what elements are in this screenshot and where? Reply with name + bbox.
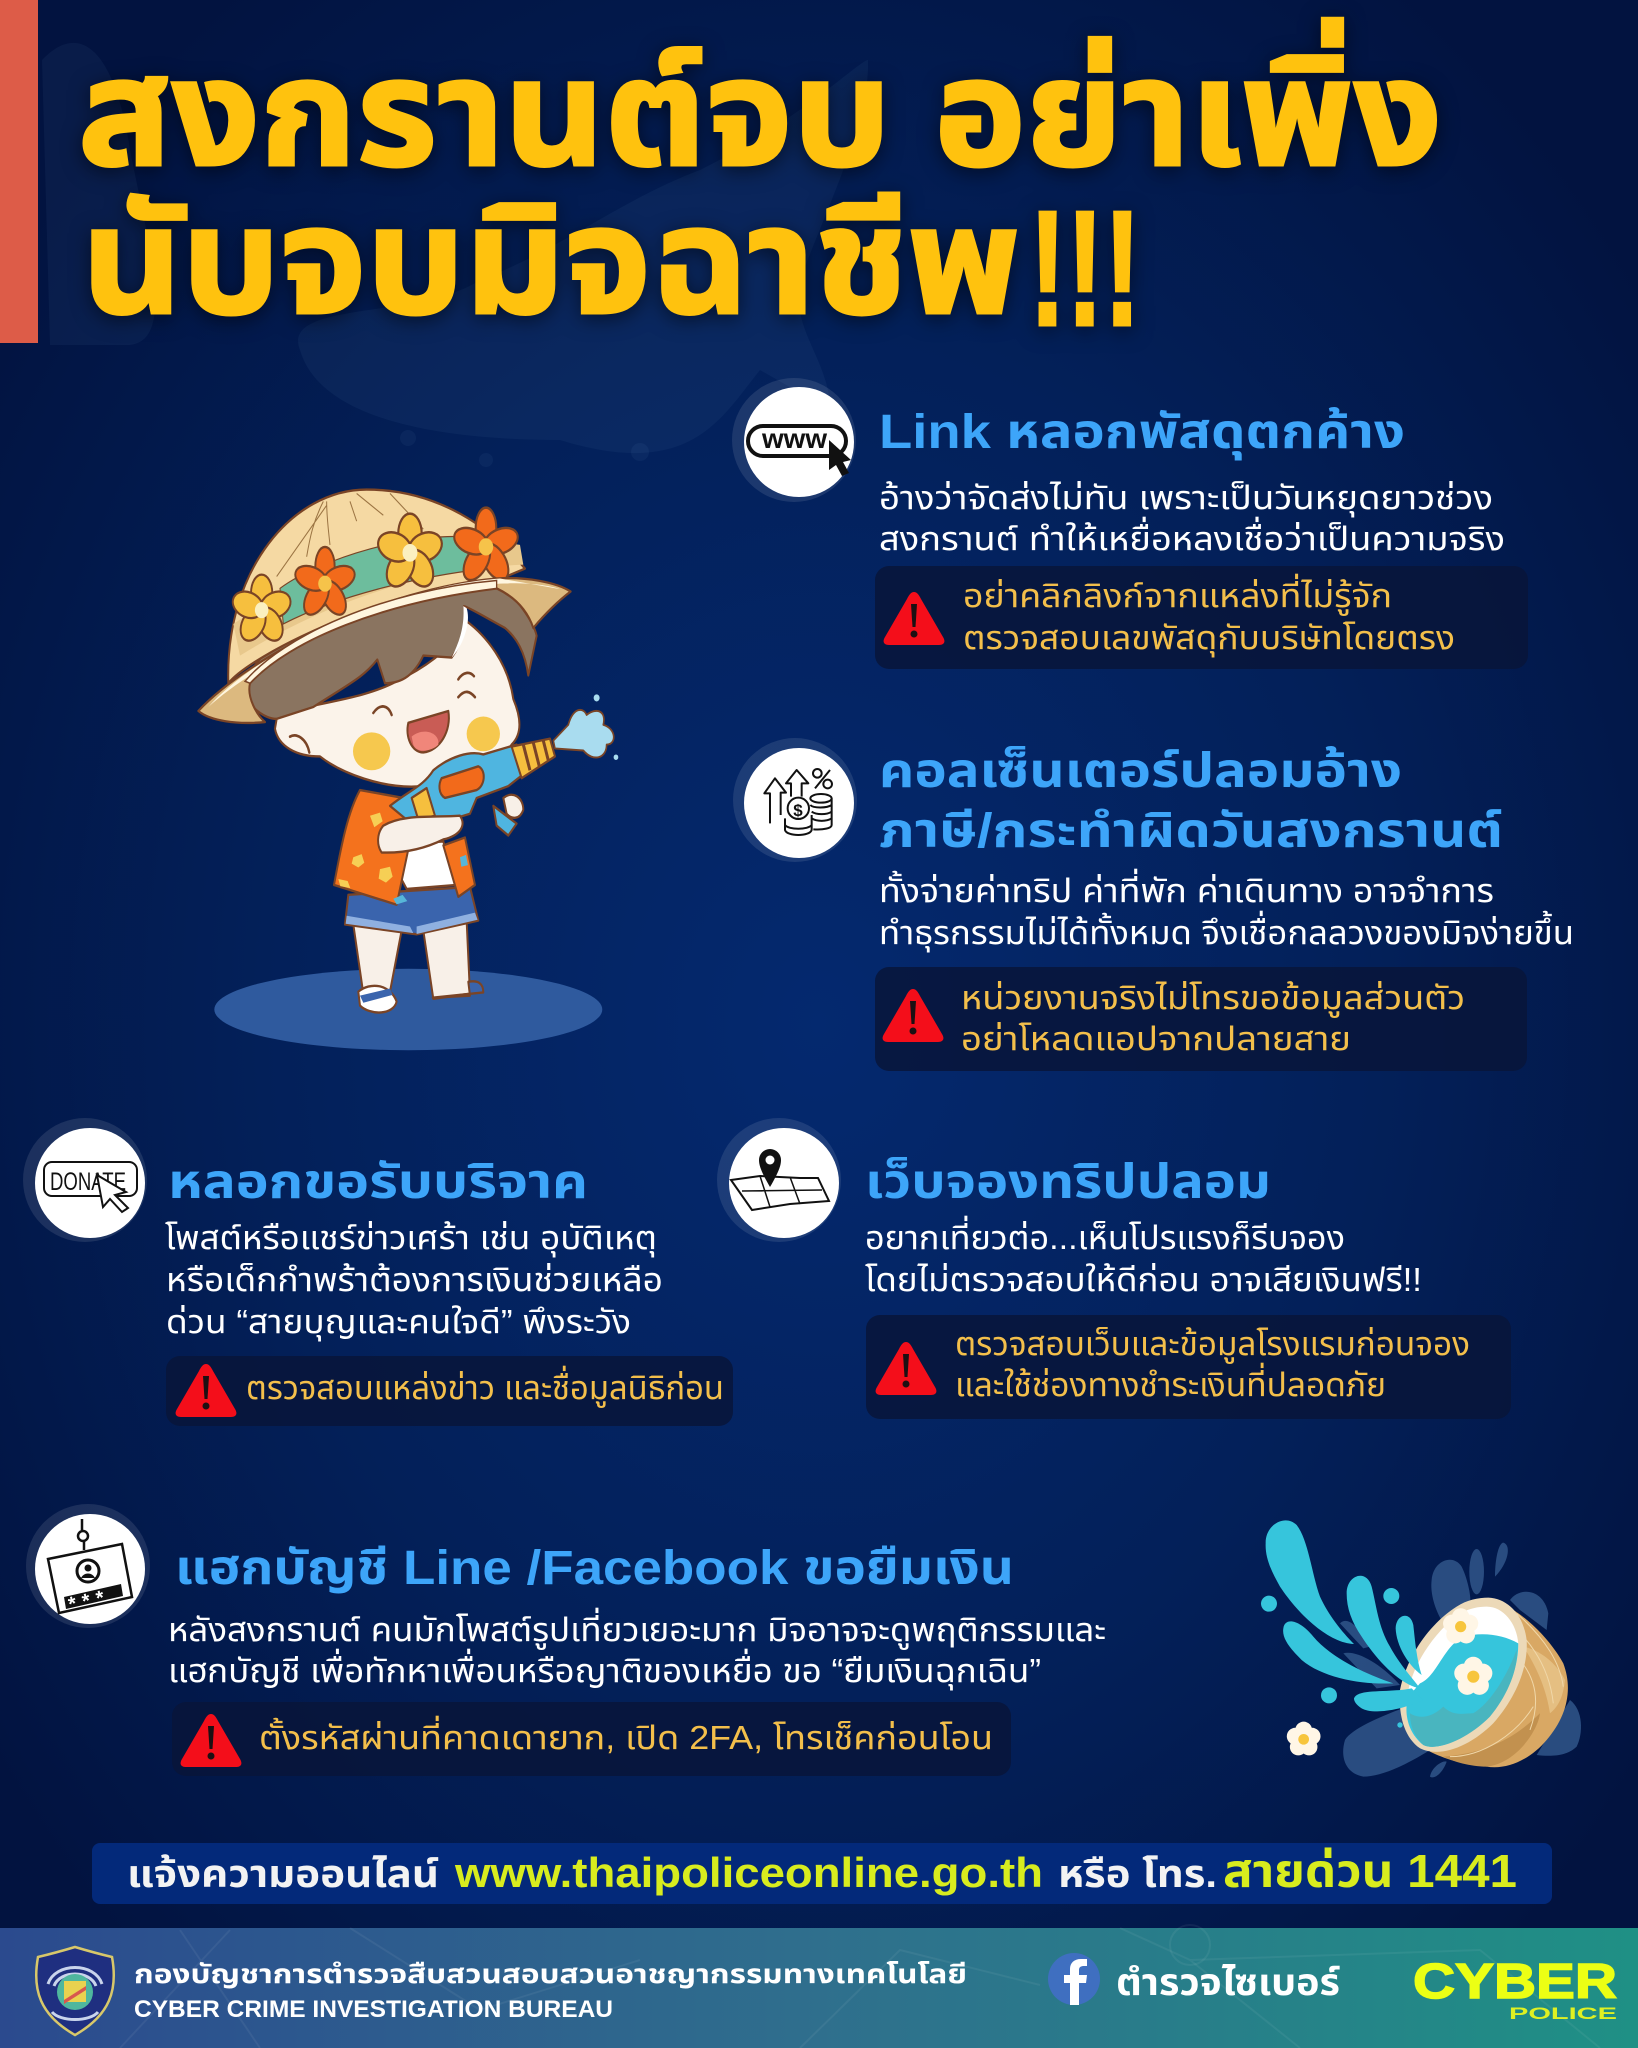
warning callout bbox=[172, 1702, 1011, 1776]
face and hair bbox=[243, 577, 537, 787]
main title: สงกรานต์จบ อย่าเพิ่ง bbox=[78, 18, 1442, 197]
description bbox=[879, 868, 1574, 953]
section: fake call center bbox=[733, 738, 1574, 1071]
icon: hook and password card: *** bbox=[66, 1587, 106, 1616]
footer band bbox=[0, 1925, 1638, 2048]
icon: money and percent bbox=[733, 738, 857, 862]
warning callout: ตั้งรหัสผ่านที่คาดเดายาก, เปิด 2FA, โทรเช็คก่อนโอน bbox=[259, 1715, 993, 1756]
heading: หลอกขอรับบริจาค bbox=[168, 1156, 588, 1209]
description: โพสต์หรือแชร์ข่าวเศร้า เช่น อุบัติเหตุ bbox=[165, 1219, 657, 1258]
arm bbox=[378, 816, 463, 853]
icon: hook and password card bbox=[26, 1504, 150, 1628]
warning callout: หน่วยงานจริงไม่โทรขอข้อมูลส่วนตัว bbox=[961, 979, 1465, 1018]
description bbox=[168, 1607, 1106, 1691]
cyber police logo bbox=[1413, 1955, 1617, 2023]
main title: นับจบมิจฉาชีพ bbox=[82, 177, 1020, 345]
watermark water splash bbox=[42, 43, 868, 467]
warning callout bbox=[166, 1356, 733, 1426]
main title bbox=[78, 18, 1442, 360]
icon: www link bbox=[732, 378, 856, 502]
heading: แฮกบัญชี Line /Facebook ขอยืมเงิน bbox=[175, 1542, 1014, 1595]
description bbox=[879, 479, 1505, 557]
bureau name: กองบัญชาการตำรวจสืบสวนสอบสวนอาชญากรรมทางเทคโนโลยี bbox=[134, 1959, 967, 1989]
description: อ้างว่าจัดส่งไม่ทัน เพราะเป็นวันหยุดยาวช่วง bbox=[879, 479, 1493, 518]
reporting hotline bar: www.thaipoliceonline.go.th bbox=[454, 1849, 1043, 1896]
bureau name bbox=[134, 1959, 967, 2023]
bureau name: CYBER CRIME INVESTIGATION BUREAU bbox=[134, 1996, 613, 2023]
warning callout: อย่าคลิกลิงก์จากแหล่งที่ไม่รู้จัก bbox=[963, 573, 1392, 616]
warning callout: อย่าโหลดแอปจากปลายสาย bbox=[961, 1020, 1351, 1057]
police shield logo bbox=[36, 1947, 114, 2035]
facebook page: ตำรวจไซเบอร์ bbox=[1116, 1962, 1340, 2003]
warning callout bbox=[875, 967, 1527, 1071]
description: สงกรานต์ ทำให้เหยื่อหลงเชื่อว่าเป็นความจริง bbox=[879, 516, 1505, 557]
reporting hotline bar: แจ้งความออนไลน์ bbox=[127, 1854, 439, 1896]
description: ทั้งจ่ายค่าทริป ค่าที่พัก ค่าเดินทาง อาจจำการ bbox=[879, 868, 1494, 909]
cyber police logo: POLICE bbox=[1509, 2004, 1617, 2023]
illustration: boy with water gun bbox=[198, 490, 618, 1050]
main title: !!! bbox=[1029, 177, 1141, 360]
red accent bar bbox=[0, 0, 38, 343]
icon: www link: www bbox=[761, 423, 827, 454]
heading: ภาษี/กระทำผิดวันสงกรานต์ bbox=[879, 805, 1503, 858]
description bbox=[165, 1219, 663, 1342]
description: โดยไม่ตรวจสอบให้ดีก่อน อาจเสียเงินฟรี!! bbox=[865, 1261, 1422, 1298]
warning callout bbox=[866, 1315, 1511, 1419]
icon: map pin bbox=[717, 1118, 841, 1242]
warning callout: ตรวจสอบเว็บและข้อมูลโรงแรมก่อนจอง bbox=[955, 1325, 1470, 1364]
description: อยากเที่ยวต่อ...เห็นโปรแรงก็รีบจอง bbox=[865, 1215, 1345, 1256]
reporting hotline bar bbox=[92, 1843, 1552, 1904]
reporting hotline bar: สายด่วน 1441 bbox=[1223, 1845, 1517, 1897]
icon: donate button bbox=[23, 1118, 147, 1242]
warning callout bbox=[875, 566, 1528, 669]
description: หรือเด็กกำพร้าต้องการเงินช่วยเหลือ bbox=[166, 1261, 663, 1298]
warning callout: ตรวจสอบเลขพัสดุกับบริษัทโดยตรง bbox=[963, 619, 1455, 658]
water gun bbox=[390, 694, 618, 836]
facebook page bbox=[1048, 1953, 1340, 2005]
cyber police logo: CYBER bbox=[1413, 1955, 1617, 2009]
heading: เว็บจองทริปปลอม bbox=[865, 1156, 1271, 1209]
description: ด่วน “สายบุญและคนใจดี” พึงระวัง bbox=[166, 1303, 631, 1342]
heading bbox=[879, 745, 1503, 858]
icon: donate button: DONATE bbox=[50, 1168, 126, 1196]
description: ทำธุรกรรมไม่ได้ทั้งหมด จึงเชื่อกลลวงของมิจง่ายขึ้น bbox=[879, 910, 1574, 953]
section: link scam bbox=[732, 378, 1528, 669]
warning callout: ตรวจสอบแหล่งข่าว และชื่อมูลนิธิก่อน bbox=[246, 1365, 724, 1408]
section: donation scam bbox=[23, 1118, 733, 1426]
heading: Link หลอกพัสดุตกค้าง bbox=[879, 406, 1405, 461]
warning callout: และใช้ช่องทางชำระเงินที่ปลอดภัย bbox=[955, 1362, 1386, 1403]
section: hacked account bbox=[26, 1504, 1106, 1776]
heading: คอลเซ็นเตอร์ปลอมอ้าง bbox=[879, 745, 1402, 798]
shorts bbox=[345, 887, 478, 934]
illustration: coconut water splash bbox=[1261, 1520, 1581, 1777]
straw hat bbox=[198, 490, 571, 723]
shirt bbox=[334, 790, 475, 905]
legs and sandals bbox=[353, 921, 483, 1013]
reporting hotline bar: หรือ โทร. bbox=[1058, 1854, 1217, 1896]
section: fake trip booking bbox=[717, 1118, 1511, 1419]
description: แฮกบัญชี เพื่อทักหาเพื่อนหรือญาติของเหยื่อ ขอ “ยืมเงินฉุกเฉิน” bbox=[168, 1648, 1041, 1691]
icon: money and percent: $ bbox=[793, 801, 803, 820]
description bbox=[865, 1215, 1422, 1298]
description: หลังสงกรานต์ คนมักโพสต์รูปเที่ยวเยอะมาก มิจอาจจะดูพฤติกรรมและ bbox=[168, 1607, 1106, 1650]
